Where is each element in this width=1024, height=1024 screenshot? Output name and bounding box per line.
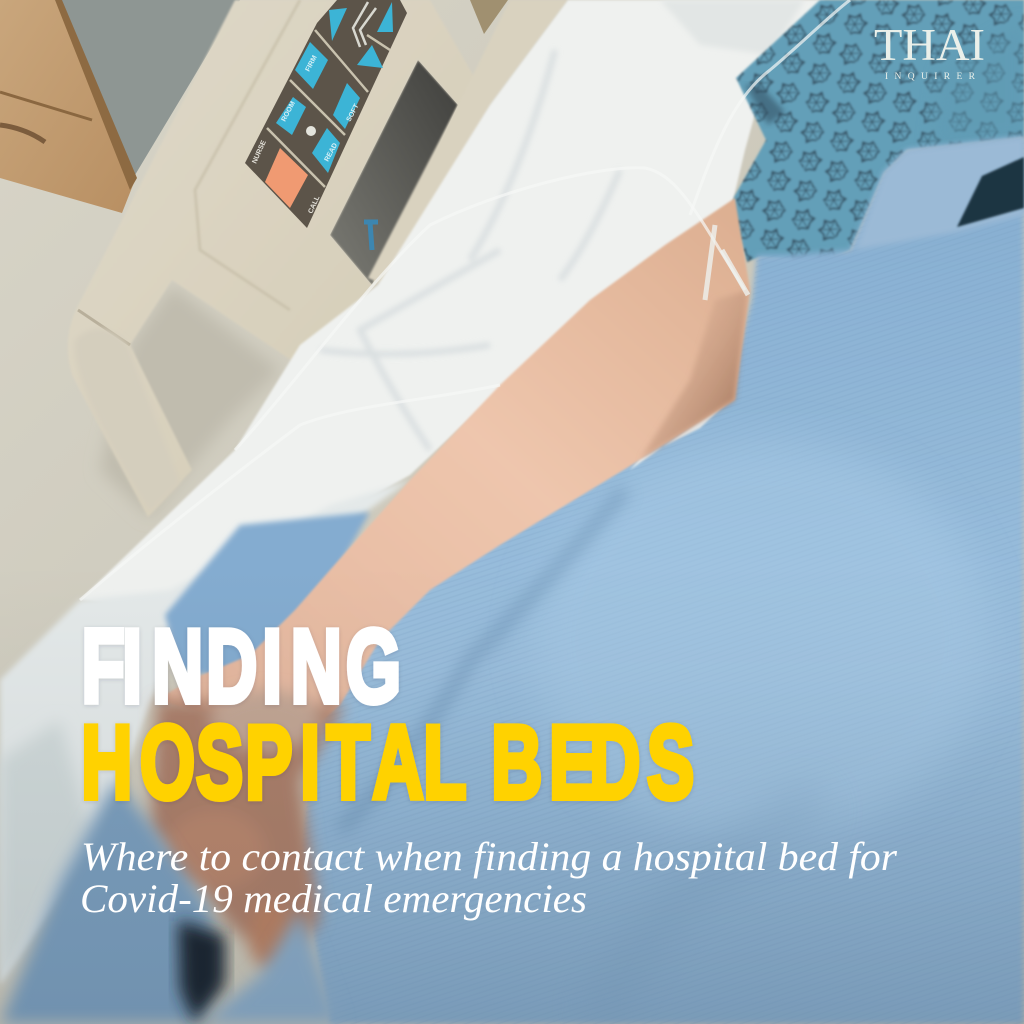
blanket highlight (530, 440, 990, 840)
lower darkening overlay (0, 560, 1024, 1024)
logo: Thai Inquirer: THAI (874, 20, 985, 70)
gap behind frame (470, 0, 508, 34)
subtitle (80, 834, 897, 921)
lower arrow button (357, 45, 383, 68)
logo: Thai Inquirer: INQUIRER (885, 72, 976, 82)
blue connector in window (364, 222, 378, 250)
panel labels (251, 54, 361, 215)
soft button (333, 83, 360, 129)
subtitle: Where to contact when finding a hospital bed for (81, 834, 897, 879)
blanket strip beside hand (200, 910, 340, 1024)
panel labels: FIRM (305, 54, 319, 73)
read button (312, 128, 340, 173)
panel labels: NURSE (251, 139, 268, 165)
IV connector on arm (705, 225, 748, 300)
panel labels: ROOM (281, 100, 297, 123)
white sheet scrap under arm (630, 395, 735, 470)
blue blanket main (300, 137, 1024, 1024)
dark gap below hand (178, 920, 225, 1024)
white bed sheet (0, 0, 825, 985)
panel labels: READ (324, 142, 339, 163)
patient arm (157, 198, 750, 740)
panel labels: SOFT (346, 103, 361, 123)
title line 2: HOSPITAL BEDS (81, 703, 694, 820)
up arrow button (329, 8, 347, 41)
bed control panel (245, 0, 407, 228)
blurred hand (150, 690, 345, 970)
room button (276, 97, 306, 135)
call button (265, 148, 308, 208)
blanket lower left (0, 780, 215, 1024)
subtitle: Covid-19 medical emergencies (80, 876, 587, 921)
blanket collar shadow (957, 157, 1024, 227)
blanket collar highlight (855, 137, 1024, 250)
right arrow button (377, 2, 393, 32)
bed icon (353, 2, 376, 47)
blanket lower fold (600, 800, 820, 1024)
title (81, 607, 694, 820)
blue blanket left section (165, 512, 370, 680)
firm button (295, 42, 328, 89)
dark window in the bed rail (330, 60, 458, 285)
title line 1: FINDING (82, 607, 401, 724)
wall panel behind rail (55, 0, 240, 175)
patterned hospital gown (732, 0, 1024, 262)
blanket fold (340, 490, 625, 830)
light bulb icon (306, 126, 316, 136)
floor shadow under rail (100, 285, 280, 517)
wooden cabinet (0, 0, 137, 213)
IV tubing (80, 0, 850, 600)
bed rail (68, 0, 568, 517)
panel labels: CALL (307, 194, 322, 215)
